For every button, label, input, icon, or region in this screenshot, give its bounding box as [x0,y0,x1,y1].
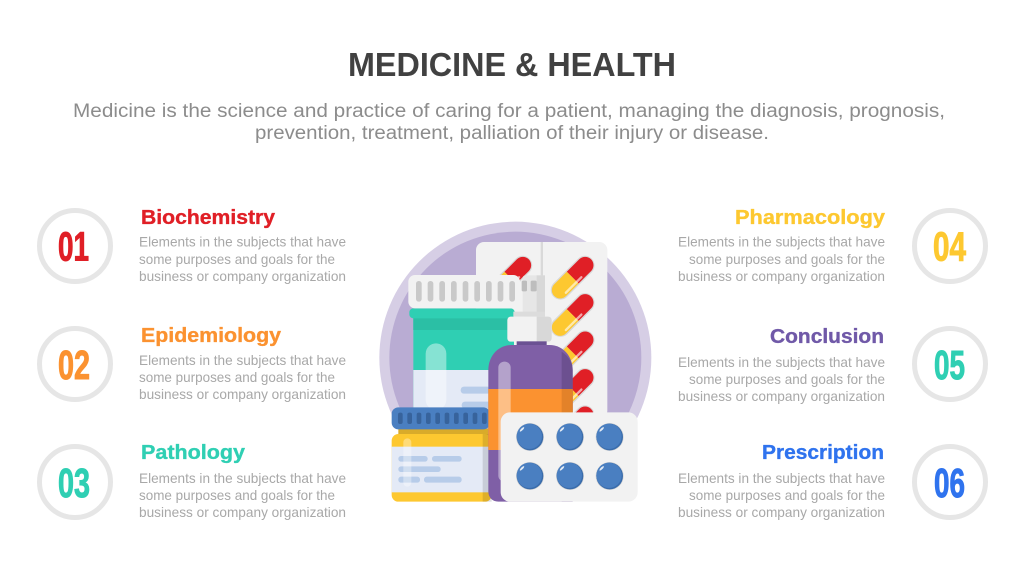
item 04: Pharmacology: Pharmacology [735,207,886,229]
icon: capsule blister pack [476,242,607,453]
item 06: Prescription: 06 [934,460,965,506]
icon: green medicine jar [408,275,520,412]
item 06: Prescription: Prescription [762,442,884,464]
item 06: Prescription: some purposes and goals for the [689,487,885,503]
item 05: Conclusion: 05 [934,342,965,388]
item 01: Biochemistry: business or company organization [139,268,346,284]
item 05: Conclusion: Conclusion [770,326,884,348]
item 06: Prescription: Elements in the subjects that have [678,470,885,486]
item 05: Conclusion [678,326,986,404]
icon: background circle [379,222,651,494]
icon: purple spray bottle [488,275,573,502]
item 01: Biochemistry [40,207,346,284]
item 03: Pathology: business or company organization [139,504,346,520]
item 04: Pharmacology [678,207,986,284]
title: MEDICINE & HEALTH [348,46,676,83]
subtitle text block: prevention, treatment, palliation of their injury or disease. [255,123,769,144]
item 01: Biochemistry: some purposes and goals for the [139,251,335,267]
item 02: Epidemiology: business or company organization [139,386,346,402]
item 04: Pharmacology: Elements in the subjects that have [678,234,885,250]
item 02: Epidemiology: Epidemiology [141,325,282,347]
item 03: Pathology: Pathology [141,442,246,464]
item 05: Conclusion: Elements in the subjects that have [678,354,885,370]
item 01: Biochemistry: Elements in the subjects that have [139,234,346,250]
item 03: Pathology: Elements in the subjects that have [139,470,346,486]
item 05: Conclusion: some purposes and goals for the [689,371,885,387]
subtitle text block [73,101,945,144]
item 04: Pharmacology: business or company organization [678,268,885,284]
item 02: Epidemiology [40,325,346,402]
subtitle text block: Medicine is the science and practice of caring for a patient, managing the diagnosis, prognosis, [73,101,945,122]
item 04: Pharmacology: 04 [933,224,966,270]
item 02: Epidemiology: some purposes and goals for the [139,369,335,385]
item 03: Pathology: some purposes and goals for the [139,487,335,503]
item 02: Epidemiology: Elements in the subjects that have [139,352,346,368]
item 01: Biochemistry: Biochemistry [141,207,276,229]
item 06: Prescription [678,442,986,520]
item 05: Conclusion: business or company organization [678,388,885,404]
item 03: Pathology: 03 [58,460,90,506]
item 01: Biochemistry: 01 [58,224,89,270]
item 06: Prescription: business or company organization [678,504,885,520]
item 02: Epidemiology: 02 [58,342,90,388]
item 03: Pathology [40,442,346,520]
icon: blue pill blister pack [501,412,638,502]
item 04: Pharmacology: some purposes and goals for the [689,251,885,267]
central medicine illustration [379,222,651,502]
icon: yellow jar with blue lid [392,407,492,502]
